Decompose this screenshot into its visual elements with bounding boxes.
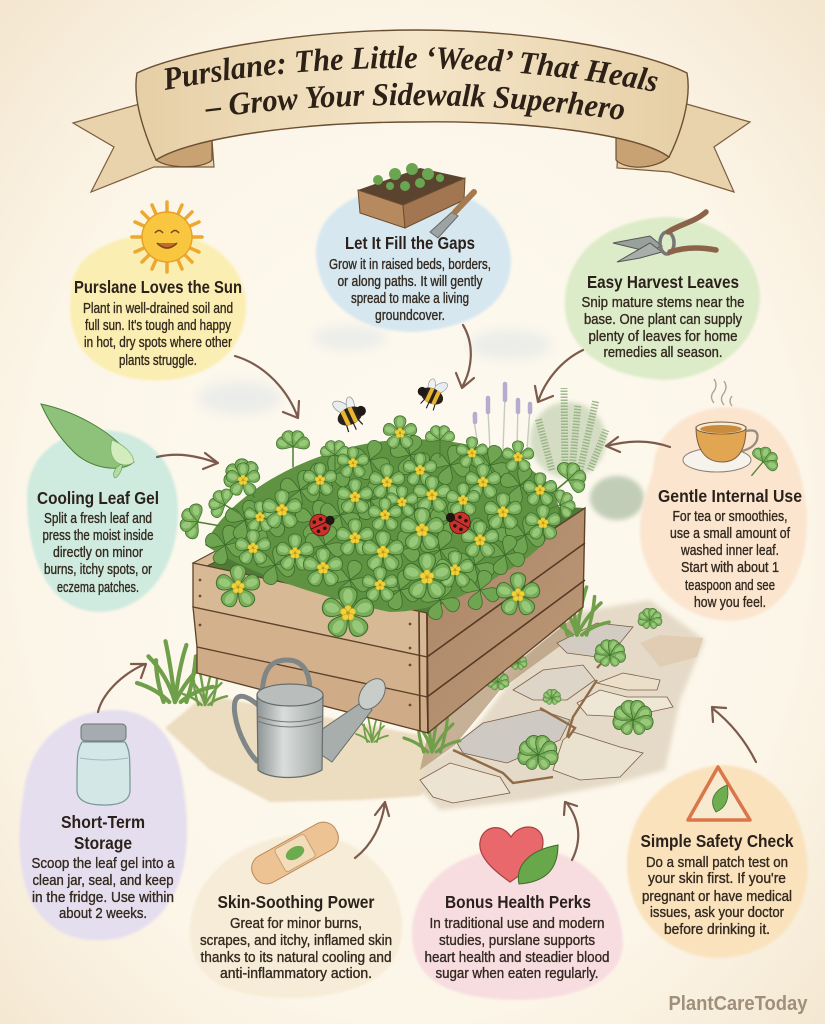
blob	[640, 407, 807, 621]
heading: Purslane Loves the Sun	[74, 277, 242, 297]
rosemary bush	[530, 388, 606, 478]
body text: Scoop the leaf gel into a	[32, 856, 175, 872]
heading: Gentle Internal Use	[658, 486, 802, 506]
ground and stone path	[165, 600, 705, 810]
watering can	[234, 660, 391, 778]
arrow: safety to path	[712, 707, 756, 762]
body text: about 2 weeks.	[59, 906, 147, 922]
small gray bush	[590, 476, 644, 520]
body text	[32, 856, 175, 922]
icon: tea cup	[683, 379, 786, 486]
panel: bonus health perks	[412, 827, 623, 1000]
body text: issues, ask your doctor	[650, 905, 784, 921]
body text: scrapes, and itchy, inflamed skin	[200, 933, 392, 949]
body text: burns, itchy spots, or	[44, 562, 152, 578]
arrows	[98, 325, 756, 860]
body text: clean jar, seal, and keep	[32, 873, 174, 889]
body text: In traditional use and modern	[430, 916, 604, 932]
body text: Start with about 1	[681, 560, 779, 576]
heading: Simple Safety Check	[640, 831, 794, 851]
blob	[316, 186, 511, 332]
soil patch	[165, 695, 445, 802]
blob	[565, 217, 760, 380]
can spout	[317, 700, 372, 762]
plank lines	[419, 543, 585, 733]
panel: gentle internal use	[640, 379, 807, 621]
panel: simple safety check	[627, 765, 808, 958]
body text: your skin first. If you're	[648, 871, 786, 887]
title text	[164, 46, 658, 120]
blob	[190, 834, 402, 998]
icon: sun	[132, 202, 202, 272]
bee right	[412, 372, 452, 413]
can handle	[234, 660, 310, 762]
faint clouds	[198, 326, 552, 415]
icon: warning triangle	[688, 767, 750, 820]
blob	[627, 765, 808, 958]
body text	[329, 257, 491, 324]
planter right face	[427, 508, 585, 733]
banner left tail	[73, 103, 214, 192]
title banner	[72, 29, 752, 194]
blob	[27, 430, 178, 612]
heading: Skin-Soothing Power	[218, 892, 375, 912]
body text	[83, 301, 233, 369]
body text	[424, 916, 610, 982]
icon: bandage	[247, 817, 343, 889]
body text	[670, 509, 791, 611]
banner left fold	[156, 139, 212, 167]
heading	[61, 812, 145, 853]
arrow: skin to path	[355, 802, 389, 858]
body text: remedies all season.	[604, 345, 722, 361]
body text: studies, purslane supports	[439, 933, 595, 949]
panel: easy harvest leaves	[565, 212, 760, 380]
body text: in hot, dry spots where other	[84, 335, 232, 351]
body text	[582, 295, 744, 361]
body text: groundcover.	[375, 308, 445, 324]
body text: washed inner leaf.	[680, 543, 779, 559]
arrow: sun to plant	[235, 356, 299, 418]
body text: in the fridge. Use within	[32, 890, 174, 906]
path plants	[486, 607, 663, 771]
ladybug left	[306, 508, 339, 539]
foliage mound	[205, 439, 558, 612]
blob	[70, 233, 246, 381]
purslane foliage	[176, 416, 595, 640]
body text: full sun. It's tough and happy	[85, 318, 232, 334]
banner body	[136, 30, 688, 160]
panel: purslane loves the sun	[70, 202, 246, 381]
can top	[257, 684, 323, 706]
arrow: gel to plant	[157, 453, 218, 469]
can rose	[353, 674, 391, 714]
body text: spread to make a living	[351, 291, 469, 307]
body text: use a small amount of	[670, 526, 791, 542]
arrow: harvest to plant	[535, 350, 583, 402]
icon: glass jar	[77, 724, 130, 805]
title text: – Grow Your Sidewalk Superhero	[205, 82, 624, 120]
heading: Storage	[74, 833, 132, 853]
body text: sugar when eaten regularly.	[436, 966, 598, 982]
paving stones	[420, 623, 703, 803]
body text: before drinking it.	[664, 922, 770, 938]
background herbs	[473, 384, 644, 520]
body text: base. One plant can supply	[584, 312, 743, 328]
body text	[642, 855, 792, 938]
body text: eczema patches.	[57, 580, 139, 596]
icon: heart and leaf	[480, 827, 558, 884]
heading: Let It Fill the Gaps	[345, 233, 475, 253]
icon: pruning shears	[613, 212, 716, 262]
panel: let it fill the gaps	[316, 163, 511, 332]
panel: skin-soothing power	[190, 817, 402, 998]
panel: short-term storage	[19, 710, 187, 940]
can body	[257, 688, 323, 778]
brand wordmark: PlantCareToday	[668, 993, 808, 1015]
body text: teaspoon and see	[685, 578, 775, 594]
body text: Snip mature stems near the	[582, 295, 744, 311]
title text: Purslane: The Little ‘Weed’ That Heals	[164, 46, 658, 92]
panel: cooling leaf gel	[27, 404, 178, 612]
icon: aloe leaf	[41, 404, 134, 478]
blob	[19, 710, 187, 940]
banner right tail	[617, 103, 750, 192]
heading: Cooling Leaf Gel	[37, 488, 159, 508]
body text: Do a small patch test on	[646, 855, 788, 871]
body text: how you feel.	[694, 595, 766, 611]
body text: Grow it in raised beds, borders,	[329, 257, 491, 273]
body text: Great for minor burns,	[230, 916, 362, 932]
body text: pregnant or have medical	[642, 889, 792, 905]
body text	[42, 511, 154, 596]
path cracks	[453, 643, 620, 783]
body text: plenty of leaves for home	[588, 329, 738, 345]
body text: directly on minor	[53, 545, 143, 561]
body text: For tea or smoothies,	[672, 509, 788, 525]
arrow: gaps to plant	[456, 325, 474, 388]
body text: or along paths. It will gently	[338, 274, 483, 290]
heading: Short-Term	[61, 812, 145, 832]
blob	[412, 848, 623, 1000]
raised wooden planter	[193, 495, 585, 733]
grass tufts	[137, 584, 609, 752]
back leaf layer	[204, 434, 546, 621]
banner right fold	[616, 138, 669, 167]
heading: Easy Harvest Leaves	[587, 272, 739, 292]
body text: Plant in well-drained soil and	[83, 301, 233, 317]
heading: Bonus Health Perks	[445, 892, 591, 912]
stone path base	[420, 600, 705, 810]
body text: press the moist inside	[42, 528, 154, 544]
lavender	[473, 384, 530, 450]
arrow: storage to plant	[98, 664, 146, 712]
body text: anti-inflammatory action.	[220, 966, 372, 982]
body text: thanks to its natural cooling and	[200, 950, 392, 966]
ladybug right	[441, 506, 474, 538]
body text: Split a fresh leaf and	[44, 511, 152, 527]
dirt strip	[420, 610, 583, 770]
planter interior	[193, 495, 585, 613]
body text: plants struggle.	[119, 353, 197, 369]
arrow: heart to path	[564, 802, 578, 860]
icon: raised bed and trowel	[358, 163, 474, 238]
planter front face	[193, 563, 428, 733]
body text: heart health and steadier blood	[424, 950, 610, 966]
leaf clusters	[176, 416, 595, 640]
bee left	[328, 389, 372, 435]
arrow: tea to plant	[606, 437, 670, 452]
planter back rim	[193, 538, 250, 566]
body text	[200, 916, 392, 982]
